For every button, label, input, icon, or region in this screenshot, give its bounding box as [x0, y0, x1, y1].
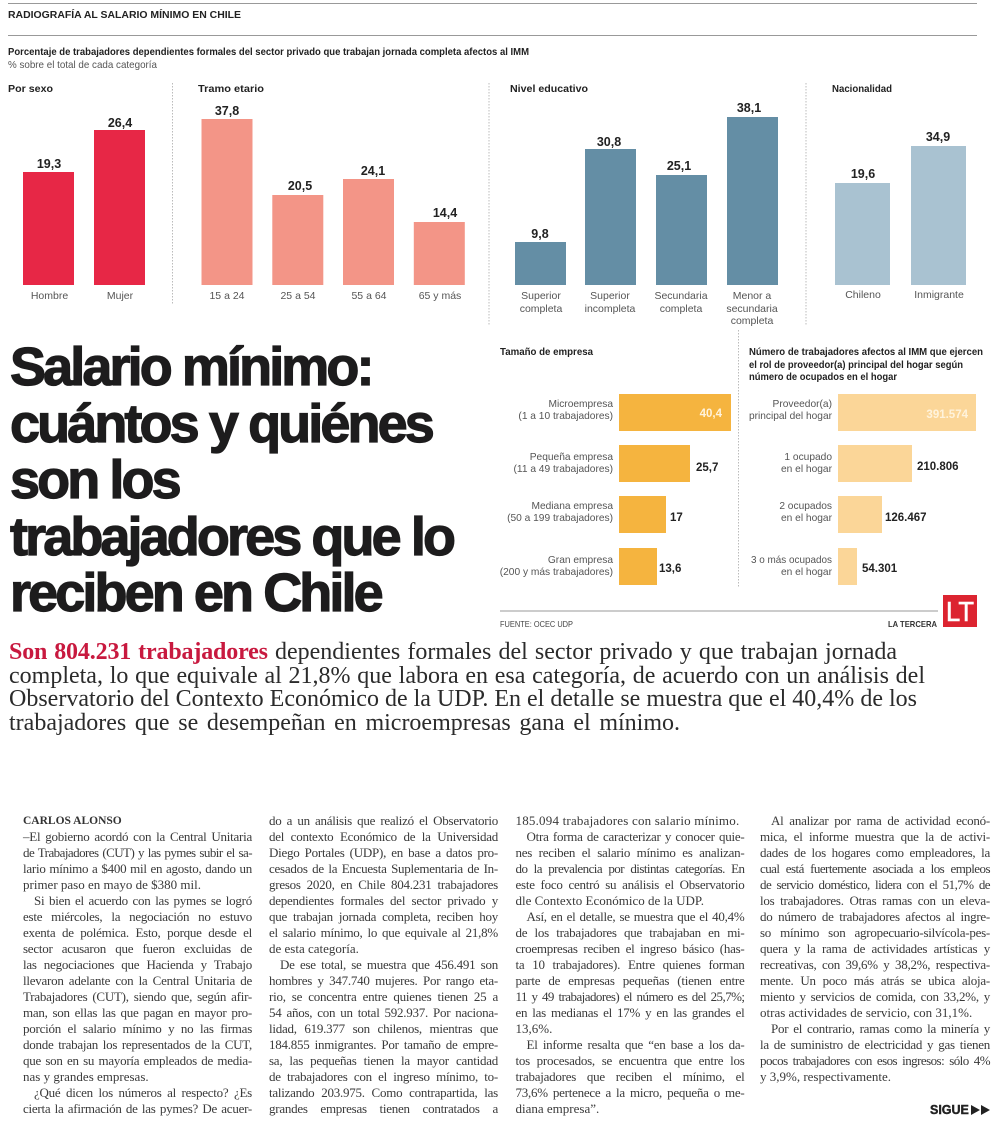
article column 2: de esta categoría. [269, 941, 359, 956]
article column 1: Si bien el acuerdo con las pymes se logró [34, 893, 252, 908]
bar chart: proveedor principal del hogar: 2 ocupados [779, 501, 832, 512]
article column 1: de Trabajadores (CUT) y las pymes subir el sa- [23, 845, 252, 860]
bar chart: tamaño de empresa: Gran empresa [548, 555, 613, 566]
article column 3: 13,6%. [516, 1021, 552, 1036]
article column 3: croempresas reciben el ingreso básico (has- [516, 941, 744, 956]
source line: FUENTE: OCEC UDP [500, 619, 573, 629]
article column 1: ¿Qué dicen los números al respecto? ¿Es [34, 1085, 252, 1100]
article column 4: la de suministro de electricidad y gas tienen [760, 1037, 990, 1052]
main title: trabajadores que lo [10, 507, 453, 567]
article column 4: y 3,9%, respectivamente. [760, 1069, 891, 1084]
article column 1: porción el salario mínimo y no las firmas [23, 1021, 252, 1036]
chart subtitle: Porcentaje de trabajadores dependientes formales del sector privado que trabajan jornada completa afectos al IMM [8, 46, 529, 58]
bar chart: tramo etario: 25 a 54 [280, 290, 316, 302]
article column 4 [760, 813, 990, 1084]
bar chart: tramo etario: 65 y más [419, 290, 461, 302]
article column 2: 54 años, con un total 592.937. Por naciona- [269, 1005, 498, 1020]
bar chart: nivel educativo: Secundaria [654, 290, 708, 302]
article column 2: De ese total, se muestra que 456.491 son [280, 957, 498, 972]
article column 1 [22, 815, 252, 1116]
article column 3: 11 y 49 trabajadores) el número es del 25,7%; [516, 989, 744, 1004]
bar chart: nivel educativo [510, 83, 778, 327]
main title: reciben en Chile [10, 563, 381, 623]
article column 1: llevaron adelante con la Central Unitaria de [23, 973, 252, 988]
article column 2: dependientes formales del sector privado y [269, 893, 498, 908]
bar chart: tamaño de empresa: Tamaño de empresa [500, 346, 593, 358]
article column 4: miento y servicios de comida, con 33,2%, y [760, 989, 990, 1004]
bar chart: tramo etario: Tramo etario [198, 83, 264, 95]
bar chart: por sexo: 26,4 [108, 116, 132, 130]
article column 2: del contexto Económico de la Universidad [269, 829, 498, 844]
article column 1: nas y grandes empresas. [23, 1069, 149, 1084]
article column 2: talizando 203.975. Como contrapartida, las [269, 1085, 498, 1100]
article column 4: Al analizar por rama de actividad econó- [771, 813, 990, 828]
article column 4: de servicio doméstico, lidera con el 51,7% de [760, 877, 990, 892]
bar chart: tamaño de empresa: Mediana empresa [531, 501, 613, 512]
article column 4: pocos trabajadores con esos ingresos: sólo 4% [760, 1053, 990, 1068]
bar chart: proveedor principal del hogar [749, 346, 983, 585]
article column 3: diana empresa”. [516, 1101, 599, 1116]
bar chart: por sexo: Mujer [107, 290, 134, 302]
charts and graphic header [8, 3, 983, 629]
bar chart: tamaño de empresa: (1 a 10 trabajadores) [518, 411, 613, 422]
article column 3: Así, en el detalle, se muestra que el 40,4% [526, 909, 744, 924]
bar chart: nivel educativo: completa [520, 303, 562, 315]
article column 4: dades de los hogares como empleadores, la [760, 845, 990, 860]
icon: LT logo: LT [946, 596, 974, 627]
bar chart: por sexo: Hombre [31, 290, 68, 302]
bar chart: nivel educativo: 30,8 [597, 135, 621, 149]
article column 1: –El gobierno acordó con la Central Unitaria [23, 829, 252, 844]
article column 3: este foco centró su análisis el Observatorio [516, 877, 744, 892]
article column 3: trabajadores que reciben el mínimo, el [516, 1069, 744, 1084]
article column 2: lidad, 619.377 son chilenos, mientras que [269, 1021, 498, 1036]
bar chart: nivel educativo: 9,8 [531, 227, 549, 241]
article column 3: nes reciben el salario mínimo es analizan- [516, 845, 744, 860]
bar chart: nivel educativo: Superior [590, 290, 630, 302]
article column 4: los trabajadores. Otras ramas con un eleva- [760, 893, 990, 908]
bar chart: proveedor principal del hogar: Número de trabajadores afectos al IMM que ejercen [749, 346, 983, 358]
article column 1: Trabajadores (CUT), siendo que, según afir- [23, 989, 252, 1004]
article column 3: en las medianas el 17% y en las grandes el [516, 1005, 744, 1020]
intro text: Observatorio del Contexto Económico de la UDP. En el detalle se muestra que el 40,4% de los [9, 686, 917, 712]
article column 2: Diego Portales (UDP), en base a datos pro- [269, 845, 498, 860]
main title: cuántos y quiénes [10, 394, 432, 454]
article column 1: las negociaciones que Hacienda y Trabajo [23, 957, 252, 972]
article column 1: sector acusaron que fueron excluidas de [23, 941, 252, 956]
credit: LA TERCERA [888, 619, 937, 629]
bar chart: tramo etario [198, 83, 465, 302]
bar chart: tamaño de empresa: 17 [670, 512, 683, 524]
intro text: Son 804.231 trabajadores dependientes formales del sector privado y que trabajan jornada [9, 639, 897, 665]
chart subtitle: % sobre el total de cada categoría [8, 59, 157, 71]
article column 4: do número de trabajadores afectos al ingre- [760, 909, 990, 924]
intro text [9, 639, 925, 736]
kicker heading: RADIOGRAFÍA AL SALARIO MÍNIMO EN CHILE [8, 8, 241, 21]
article column 2: hombres y 347.740 mujeres. Por rango eta- [269, 973, 498, 988]
article column 2: grandes empresas tienen contratados a [269, 1101, 498, 1116]
bar chart: nivel educativo: completa [660, 303, 702, 315]
article column 3: tos procesados, se encuentra que entre los [516, 1053, 744, 1068]
article column 2: rio, se concentra entre quienes tienen 25 a [269, 989, 498, 1004]
bar chart: tramo etario: 37,8 [215, 104, 239, 118]
bar chart: proveedor principal del hogar: en el hogar [781, 513, 833, 524]
bar chart: nivel educativo: secundaria [726, 303, 778, 315]
bar chart: tramo etario: 24,1 [361, 164, 385, 178]
article column 1: que son en su mayoría empleados de media- [23, 1053, 252, 1068]
article column 3: Otra forma de caracterizar y conocer quie- [526, 829, 744, 844]
bar chart: por sexo: 19,3 [37, 157, 61, 171]
article column 4: mica, el informe muestra que la de activi- [760, 829, 990, 844]
main title: son los [10, 450, 179, 510]
article column 1: cierta la afirmación de las pymes? De acuer- [23, 1101, 252, 1116]
article column 1: CARLOS ALONSO [23, 815, 122, 827]
article column 3: ta 10 trabajadores). Entre quienes forman [516, 957, 744, 972]
bar chart: nacionalidad: Nacionalidad [832, 83, 892, 95]
article column 3: 185.094 trabajadores con salario mínimo. [516, 813, 739, 828]
article column 1: donde trabajan los representados de la CUT, [23, 1037, 252, 1052]
main title: Salario mínimo: [10, 337, 372, 397]
bar chart: proveedor principal del hogar: 126.467 [885, 512, 927, 524]
intro text: completa, lo que equivale al 21,8% que labora en esa categoría, de acuerdo con un análisis del [9, 663, 925, 689]
bar chart: proveedor principal del hogar: en el hogar [781, 567, 833, 578]
bar chart: tamaño de empresa [500, 346, 731, 585]
bar chart: tamaño de empresa: 25,7 [696, 462, 718, 474]
bar chart: proveedor principal del hogar: en el hogar [781, 464, 833, 475]
article column 1: man, son ellas las que pagan en mayor pro- [23, 1005, 252, 1020]
article column 3: El informe resalta que “en base a los da- [526, 1037, 744, 1052]
article column 4: cual está fuertemente asociada a los empleos [760, 861, 990, 876]
article column 1: exenta de polémica. Esto, porque desde el [23, 925, 252, 940]
bar chart: nacionalidad: Inmigrante [914, 289, 964, 301]
bar chart: proveedor principal del hogar: 1 ocupado [784, 452, 832, 463]
bar chart: tamaño de empresa: Microempresa [548, 399, 613, 410]
bar chart: proveedor principal del hogar: 54.301 [862, 563, 898, 575]
article column 2: que trabajan jornada completa, reciben hoy [269, 909, 498, 924]
continuation marker: sigue: SIGUE [930, 1103, 969, 1117]
bar chart: nivel educativo: 25,1 [667, 159, 691, 173]
bar chart: tamaño de empresa: Pequeña empresa [530, 452, 613, 463]
bar chart: proveedor principal del hogar: el rol de proveedor(a) principal del hogar según [749, 359, 963, 371]
bar chart: por sexo: Por sexo [8, 83, 53, 95]
article column 3: do la prevalencia por distintas categorías. En [516, 861, 744, 876]
bar chart: tramo etario: 14,4 [433, 206, 457, 220]
bar chart: proveedor principal del hogar: 391.574 [926, 409, 969, 421]
article column 2: 184.855 inmigrantes. Por tamaño de empre- [269, 1037, 498, 1052]
bar chart: tamaño de empresa: (50 a 199 trabajadores) [507, 513, 613, 524]
article column 1: este miércoles, la negociación no estuvo [23, 909, 252, 924]
bar chart: nivel educativo: completa [731, 315, 773, 327]
article column 4: mente. Un poco más atrás se ubica aloja- [760, 973, 990, 988]
article column 3: dle Contexto Económico de la UDP. [516, 893, 704, 908]
bar chart: proveedor principal del hogar: número de ocupados en el hogar [749, 371, 897, 383]
article column 2: cesados de la Encuesta Suplementaria de In- [269, 861, 498, 876]
bar chart: proveedor principal del hogar: Proveedor(a) [773, 399, 832, 410]
bar chart: tamaño de empresa: 13,6 [659, 563, 681, 575]
bar chart: nivel educativo: Superior [521, 290, 561, 302]
bar chart: nacionalidad [832, 83, 966, 301]
bar chart: nacionalidad: 34,9 [926, 130, 950, 144]
article column 3: parte de empresas pequeñas (tienen entre [516, 973, 744, 988]
article column 4: so mínimo son agropecuario-silvícola-pes- [760, 925, 990, 940]
bar chart: nacionalidad: Chileno [845, 289, 881, 301]
bar chart: por sexo [8, 83, 145, 302]
bar chart: nacionalidad: 19,6 [851, 167, 875, 181]
article column 4: Por el contrario, ramas como la minería y [771, 1021, 990, 1036]
article column 1: primer paso en mayo de $380 mil. [23, 877, 201, 892]
bar chart: nivel educativo: Nivel educativo [510, 83, 588, 95]
article column 2: do a un análisis que realizó el Observatorio [269, 813, 498, 828]
bar chart: tramo etario: 55 a 64 [351, 290, 387, 302]
article column 4: recreativas, con 39,6% y 38,2%, respectiva- [760, 957, 990, 972]
bar chart: tramo etario: 20,5 [288, 179, 312, 193]
article column 4: otras actividades de servicio, con 31,1%. [760, 1005, 972, 1020]
intro text: trabajadores que se desempeñan en microempresas gana el mínimo. [9, 710, 680, 736]
bar chart: tamaño de empresa: 40,4 [700, 408, 723, 420]
bar chart: proveedor principal del hogar: principal del hogar [749, 411, 833, 422]
article column 2: sa, las pequeñas tienen la mayor cantidad [269, 1053, 498, 1068]
article column 2: de trabajadores con el ingreso mínimo, to- [269, 1069, 498, 1084]
article column 3 [516, 813, 745, 1116]
bar chart: nivel educativo: Menor a [733, 290, 771, 302]
bar chart: tramo etario: 15 a 24 [209, 290, 245, 302]
bar chart: tamaño de empresa: (11 a 49 trabajadores) [514, 464, 613, 475]
article column 3: 73,6% pertenece a la micro, pequeña o me- [516, 1085, 744, 1100]
bar chart: nivel educativo: 38,1 [737, 101, 761, 115]
bar chart: tamaño de empresa: (200 y más trabajadores) [500, 567, 613, 578]
article column 1: lario mínimo a $400 mil en agosto, dando un [23, 861, 252, 876]
article column 3: de los trabajadores que trabajaban en mi- [516, 925, 744, 940]
bar chart: proveedor principal del hogar: 3 o más ocupados [751, 555, 832, 566]
article column 2 [269, 813, 498, 1116]
main title [10, 337, 454, 623]
bar chart: proveedor principal del hogar: 210.806 [917, 461, 959, 473]
article column 2: gresos 2020, en Chile 804.231 trabajadores [269, 877, 498, 892]
article column 2: el salario mínimo, lo que equivale al 21,8% [269, 925, 498, 940]
bar chart: nivel educativo: incompleta [585, 303, 636, 315]
chart subtitle [8, 46, 529, 71]
continuation marker: sigue [930, 1103, 990, 1117]
article column 4: quera y la rama de actividades artísticas y [760, 941, 990, 956]
